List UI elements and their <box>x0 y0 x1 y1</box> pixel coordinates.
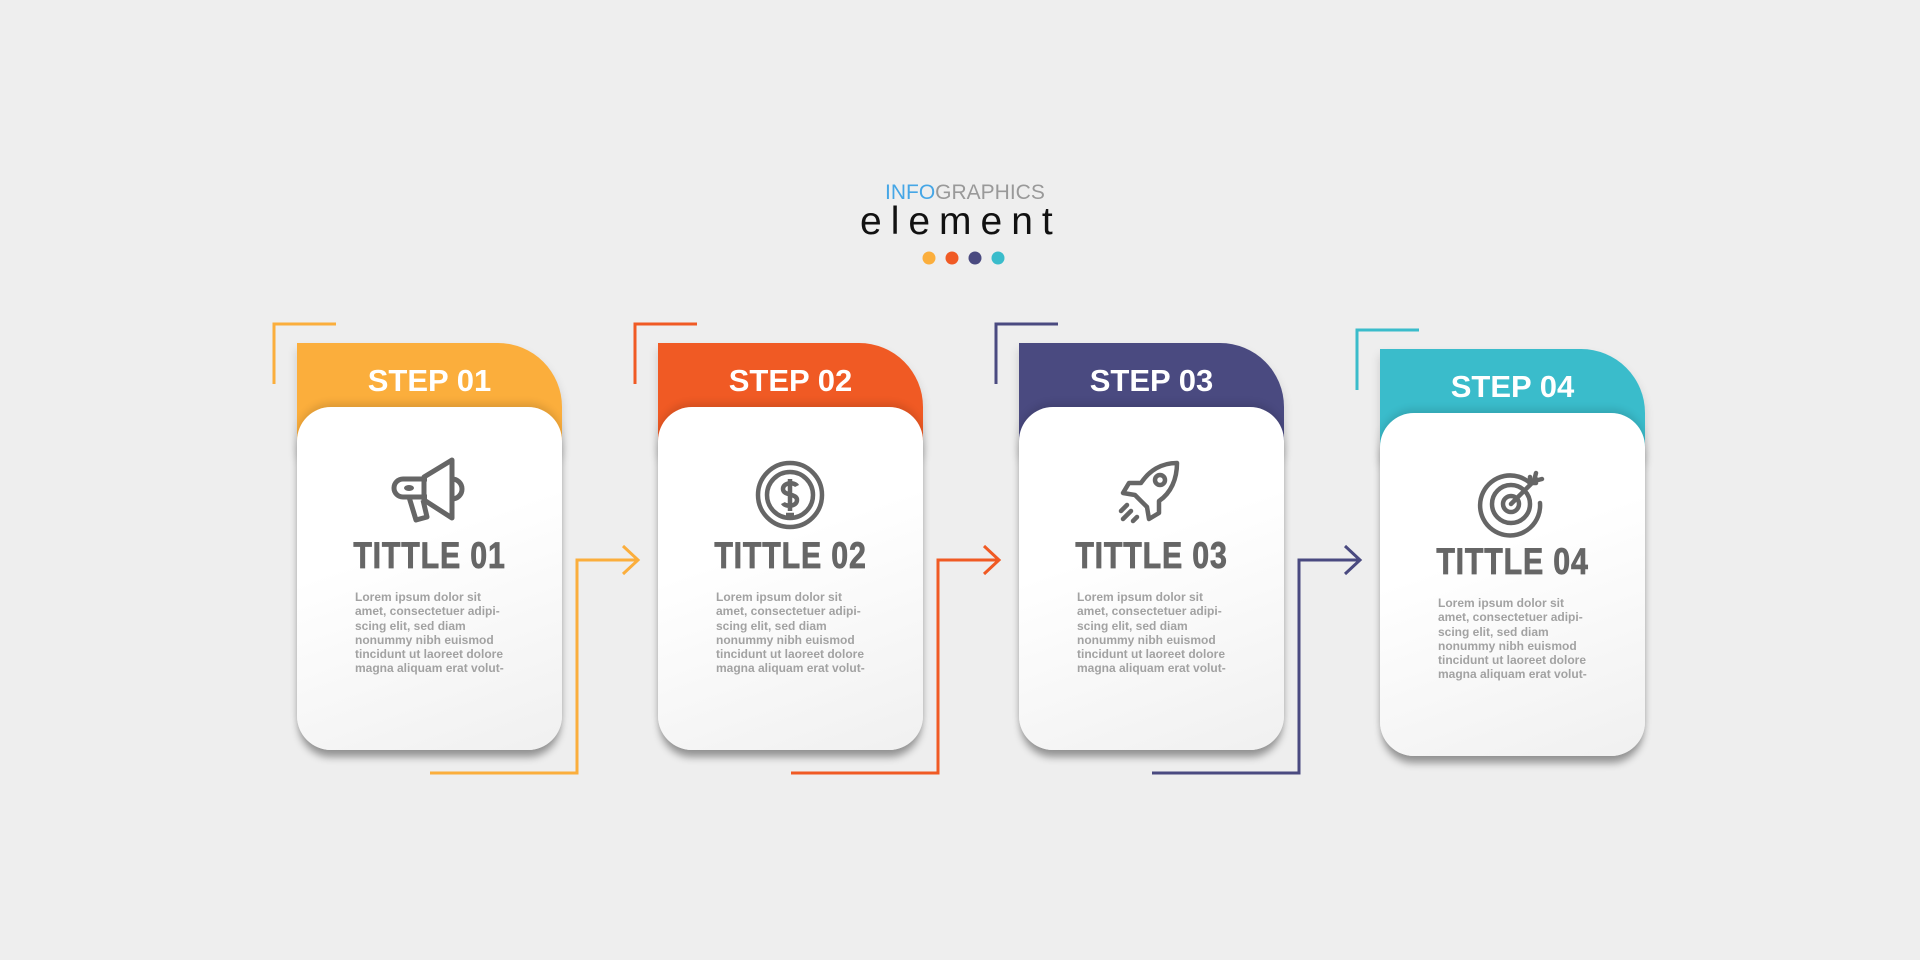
arrow <box>1152 544 1362 774</box>
icon: target <box>1478 470 1544 538</box>
title text: TITTLE 03 <box>1075 535 1228 576</box>
panel: step 01 <box>272 322 640 774</box>
panel: step 04 <box>1356 328 1650 768</box>
panel: step 02 <box>634 322 1002 774</box>
card <box>658 407 923 750</box>
header: STEP 02 <box>658 343 923 453</box>
body text: nonummy nibh euismod <box>1438 639 1577 653</box>
card <box>1380 413 1645 756</box>
dots <box>922 252 1004 264</box>
body text: amet, consectetuer adipi- <box>1077 604 1222 618</box>
body text: magna aliquam erat volut- <box>1438 667 1587 681</box>
body text <box>1077 590 1226 675</box>
body text: scing elit, sed diam <box>355 619 466 633</box>
body text: magna aliquam erat volut- <box>1077 661 1226 675</box>
body text: Lorem ipsum dolor sit <box>355 590 481 604</box>
body text: Lorem ipsum dolor sit <box>716 590 842 604</box>
bracket <box>634 322 697 384</box>
icon: megaphone <box>392 458 464 522</box>
body text: amet, consectetuer adipi- <box>716 604 861 618</box>
body text: tincidunt ut laoreet dolore <box>1438 653 1586 667</box>
body text: magna aliquam erat volut- <box>716 661 865 675</box>
title text: TITTLE 04 <box>1436 541 1589 582</box>
header: STEP 01: STEP 01 <box>368 363 491 398</box>
bracket <box>1356 328 1419 390</box>
body text: amet, consectetuer adipi- <box>1438 610 1583 624</box>
body text: magna aliquam erat volut- <box>355 661 504 675</box>
body text: nonummy nibh euismod <box>355 633 494 647</box>
body text: tincidunt ut laoreet dolore <box>716 647 864 661</box>
title <box>860 181 1062 264</box>
heading: infographics: INFOGRAPHICS <box>885 181 1045 204</box>
header: STEP 03: STEP 03 <box>1090 363 1213 398</box>
header: STEP 02: STEP 02 <box>729 363 852 398</box>
body text: scing elit, sed diam <box>716 619 827 633</box>
body text <box>355 590 504 675</box>
body text: scing elit, sed diam <box>1077 619 1188 633</box>
body text <box>716 590 865 675</box>
body text: tincidunt ut laoreet dolore <box>355 647 503 661</box>
body text: Lorem ipsum dolor sit <box>1077 590 1203 604</box>
card <box>1019 407 1284 750</box>
title text: TITTLE 01 <box>353 535 506 576</box>
heading: element: element <box>860 200 1062 243</box>
arrow <box>791 544 1002 774</box>
title text: TITTLE 02 <box>714 535 867 576</box>
body text: amet, consectetuer adipi- <box>355 604 500 618</box>
arrow <box>430 544 640 774</box>
bracket <box>994 322 1058 384</box>
body text <box>1438 596 1587 681</box>
body text: nonummy nibh euismod <box>716 633 855 647</box>
body text: tincidunt ut laoreet dolore <box>1077 647 1225 661</box>
panel: step 03 <box>994 322 1362 774</box>
header: STEP 04 <box>1380 349 1645 459</box>
body text: scing elit, sed diam <box>1438 625 1549 639</box>
card <box>297 407 562 750</box>
icon: dollar coin <box>756 460 824 530</box>
body text: Lorem ipsum dolor sit <box>1438 596 1564 610</box>
header: STEP 04: STEP 04 <box>1451 369 1574 404</box>
body text: nonummy nibh euismod <box>1077 633 1216 647</box>
header: STEP 01 <box>297 343 562 453</box>
header: STEP 03 <box>1019 343 1284 453</box>
icon: rocket <box>1118 460 1180 524</box>
bracket <box>272 322 336 384</box>
